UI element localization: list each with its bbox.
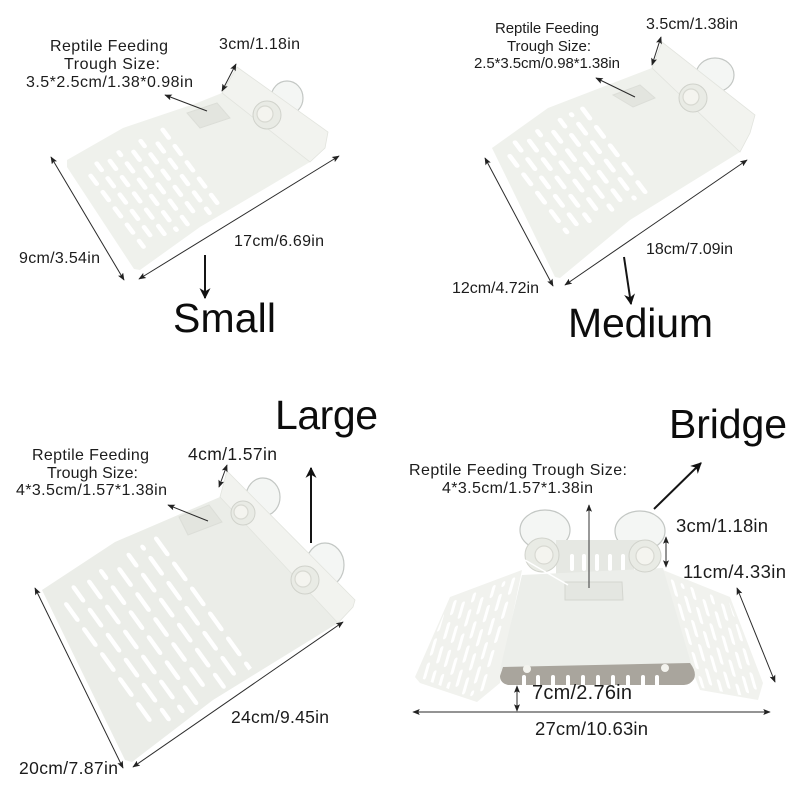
- panel: bridge platform: [409, 401, 787, 739]
- trough size label: Trough Size:: [507, 38, 591, 55]
- length label: 24cm/9.45in: [231, 707, 329, 727]
- trough size label: Reptile Feeding: [495, 20, 599, 37]
- left ramp slots: [423, 578, 515, 696]
- trough size label: 4*3.5cm/1.57*1.38in: [442, 480, 593, 497]
- trough size label: Reptile Feeding Trough Size:: [409, 462, 627, 479]
- arrow to heading: [624, 257, 631, 304]
- trough size label: 4*3.5cm/1.57*1.38in: [16, 482, 167, 499]
- trough size label: Reptile Feeding: [32, 447, 149, 464]
- grey end wall: [500, 663, 695, 685]
- mounting knobs: [525, 538, 661, 572]
- back wall: [222, 67, 328, 162]
- trough size label: Trough Size:: [47, 465, 138, 482]
- trough size label: [409, 462, 627, 497]
- mounting knob: [679, 84, 707, 112]
- suction cups: [246, 478, 344, 587]
- length arrow: [139, 156, 339, 279]
- arrow to heading: [654, 463, 701, 509]
- feeding trough: [179, 505, 222, 535]
- panel: small platform: [19, 36, 339, 341]
- total width arrow: [413, 711, 770, 713]
- panel: medium platform: [452, 16, 755, 346]
- arrow to heading: [310, 468, 312, 543]
- centre plate: [500, 568, 693, 670]
- trough size label: Trough Size:: [64, 56, 160, 73]
- length arrow: [133, 622, 343, 767]
- trough leader arrow: [588, 505, 590, 588]
- width arrow: [485, 158, 553, 286]
- slot pattern: [504, 109, 646, 232]
- heading: Small: Small: [173, 295, 276, 341]
- wall height label: 3cm/1.18in: [676, 515, 768, 536]
- trough leader arrow: [168, 505, 208, 521]
- wall height arrow: [219, 465, 227, 487]
- arrow to heading: [204, 255, 206, 298]
- clearance label: 7cm/2.76in: [532, 682, 632, 704]
- back wall with slots: [556, 540, 650, 574]
- platform plate: [67, 67, 328, 270]
- end wall slots and holes: [523, 664, 669, 685]
- length label: 17cm/6.69in: [234, 233, 324, 250]
- white guide line: [525, 560, 568, 585]
- length label: 18cm/7.09in: [646, 241, 733, 258]
- platform plate: [42, 471, 355, 762]
- suction cup: [271, 81, 303, 115]
- right ramp slots: [671, 580, 756, 695]
- wall height label: 3cm/1.18in: [219, 36, 300, 53]
- wall height arrow: [222, 64, 236, 91]
- trough size label: Reptile Feeding: [50, 38, 168, 55]
- heading: Bridge: Bridge: [669, 401, 787, 447]
- trough leader arrow: [596, 78, 635, 97]
- heading: Large: Large: [275, 392, 378, 438]
- trough leader arrow: [165, 95, 207, 111]
- width label: 12cm/4.72in: [452, 280, 539, 297]
- width label: 9cm/3.54in: [19, 250, 100, 267]
- wall height arrow: [665, 537, 667, 567]
- slot pattern: [60, 539, 251, 727]
- ramp length label: 11cm/4.33in: [683, 561, 786, 582]
- trough size label: [474, 20, 620, 72]
- wall height label: 3.5cm/1.38in: [646, 16, 738, 33]
- left ramp: [415, 570, 522, 702]
- mounting knobs: [231, 501, 319, 594]
- platform plate: [492, 42, 755, 278]
- feeding trough: [565, 582, 623, 600]
- total width label: 27cm/10.63in: [535, 718, 648, 739]
- width label: 20cm/7.87in: [19, 758, 118, 778]
- mounting knob: [253, 101, 281, 129]
- trough size label: [26, 38, 193, 91]
- slot pattern: [86, 130, 220, 247]
- trough size label: 2.5*3.5cm/0.98*1.38in: [474, 55, 620, 72]
- length arrow: [565, 160, 747, 285]
- ramp length arrow: [737, 588, 775, 682]
- feeding trough: [613, 85, 655, 107]
- suction cups: [520, 510, 665, 551]
- width arrow: [51, 157, 124, 280]
- width arrow: [35, 588, 123, 768]
- panel: large platform: [16, 392, 378, 778]
- trough size label: 3.5*2.5cm/1.38*0.98in: [26, 74, 193, 91]
- heading: Medium: Medium: [568, 300, 713, 346]
- suction cup: [696, 58, 734, 92]
- right ramp: [663, 570, 763, 700]
- back wall: [220, 471, 355, 623]
- wall height label: 4cm/1.57in: [188, 444, 277, 464]
- trough size label: [16, 447, 167, 499]
- feeding trough: [187, 103, 230, 128]
- back wall: [652, 42, 755, 152]
- wall height arrow: [652, 37, 661, 65]
- clearance arrow: [516, 686, 518, 711]
